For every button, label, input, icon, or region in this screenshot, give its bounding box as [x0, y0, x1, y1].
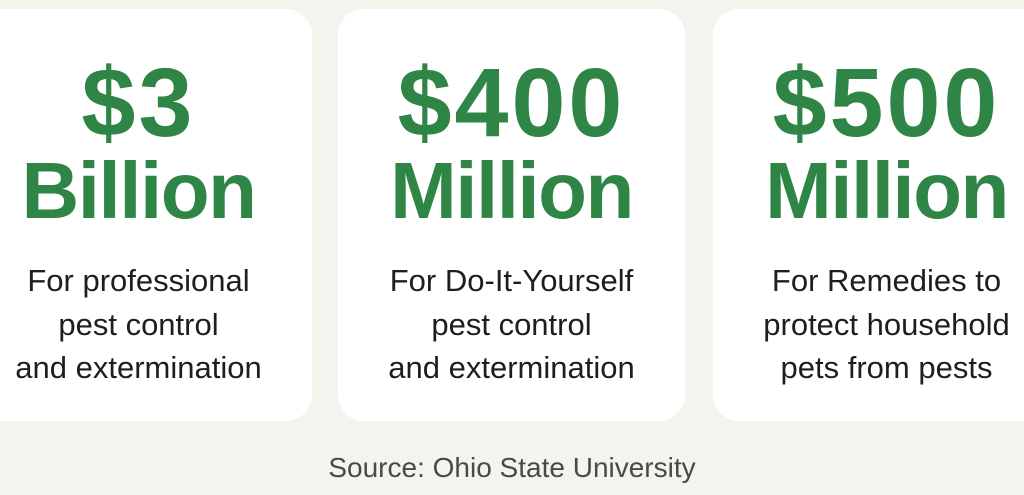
description: pest control — [431, 306, 592, 342]
description: pest control — [58, 306, 219, 342]
card: professional — [0, 9, 312, 421]
card: pet remedies — [713, 9, 1024, 421]
stat number: $400 — [398, 48, 625, 157]
stat number: $3 — [82, 48, 195, 157]
stat unit: Billion — [22, 146, 255, 235]
description: For Remedies to — [772, 263, 1001, 298]
source: Source: Ohio State University — [328, 452, 696, 483]
description: pets from pests — [781, 350, 992, 385]
description: For Do-It-Yourself — [390, 263, 633, 298]
description — [763, 263, 1010, 385]
description: For professional — [27, 263, 250, 298]
stat unit: Million — [390, 146, 633, 235]
card: DIY — [338, 9, 685, 421]
stat number: $500 — [773, 48, 1000, 157]
stat unit: Million — [765, 146, 1008, 235]
description: and extermination — [388, 350, 635, 385]
description — [388, 263, 635, 385]
description: protect household — [763, 306, 1010, 342]
description — [15, 263, 262, 385]
description: and extermination — [15, 350, 262, 385]
